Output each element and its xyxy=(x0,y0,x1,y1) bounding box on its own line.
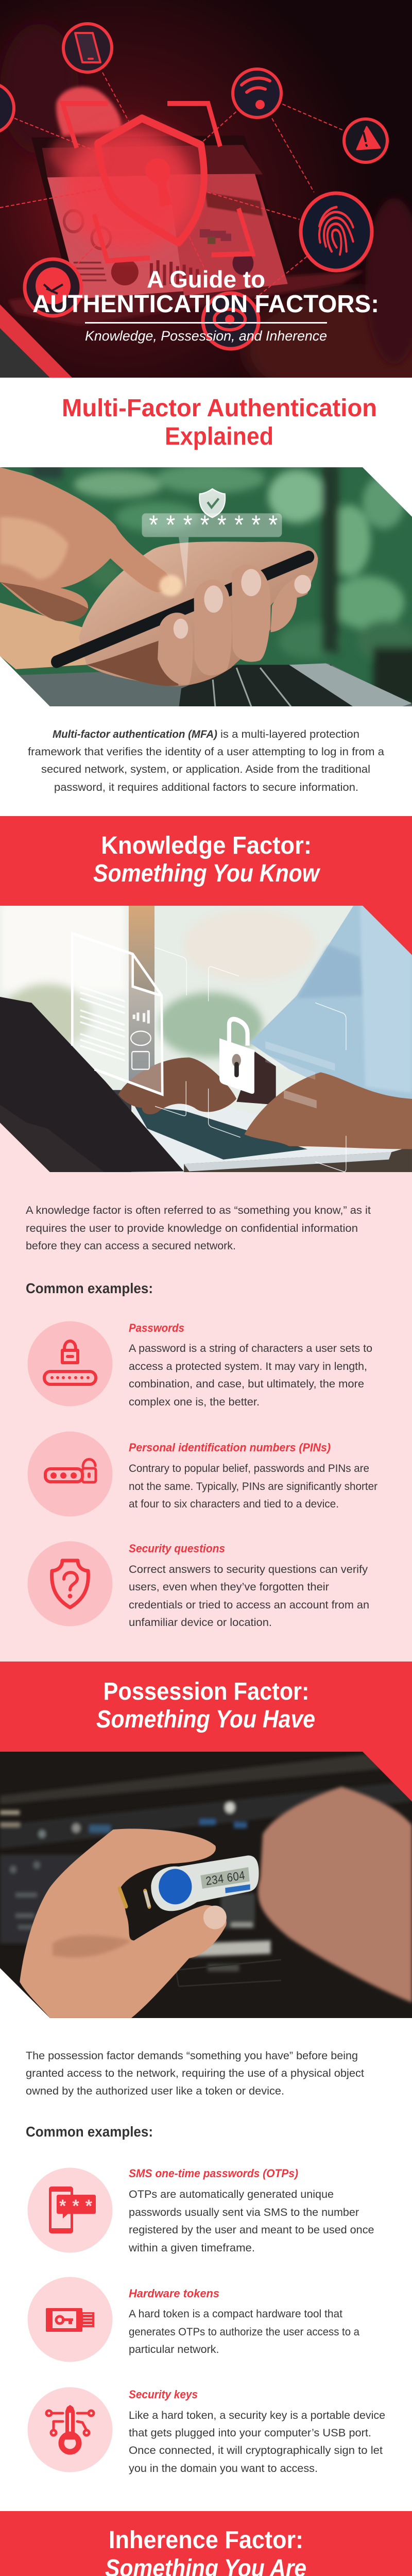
icon: partial left circle xyxy=(0,83,14,133)
icon: circuit key xyxy=(28,2387,112,2472)
heading: multi-factor authentication explained: Explained xyxy=(165,423,273,450)
example: passwords: combination, and case, but ultimately, the more xyxy=(129,1378,364,1390)
text block: mfa definition: Multi-factor authentication (MFA) xyxy=(53,728,217,740)
heading banner: possession factor xyxy=(0,1662,412,1803)
heading: multi-factor authentication explained xyxy=(62,395,377,450)
heading banner: knowledge factor: Knowledge Factor: xyxy=(101,832,312,859)
text block: mfa definition: framework that verifies the identity of a user attempting to log in from a xyxy=(28,746,384,758)
example: personal identification numbers: Contrary to popular belief, passwords and PINs are xyxy=(129,1463,369,1475)
text block: mfa definition: secured network, system, or application. Aside from the traditional xyxy=(41,764,370,775)
heading banner: inherence factor: Inherence Factor: xyxy=(109,2527,303,2554)
hero illustration xyxy=(0,0,412,408)
example: sms one-time passwords: SMS one-time passwords (OTPs) xyxy=(129,2167,298,2180)
example: security keys: you in the domain you want to access. xyxy=(129,2463,318,2475)
example: personal identification numbers: not the same. Typically, PINs are significantly shorter xyxy=(129,1481,377,1493)
example: security questions: users, even when they’ve forgotten their xyxy=(129,1581,329,1593)
example: hardware tokens: Hardware tokens xyxy=(129,2287,219,2300)
example: security questions: unfamiliar device or location. xyxy=(129,1617,272,1629)
text block: knowledge factor description: requires the user to provide knowledge on confidential information xyxy=(26,1223,358,1234)
example: security questions: Correct answers to security questions can verify xyxy=(129,1564,368,1575)
icon: hardware token xyxy=(28,2277,112,2362)
text block: knowledge factor description: A knowledge factor is often referred to as “something you know,” as it xyxy=(26,1205,371,1216)
text block: mfa definition: password, it requires additional factors to secure information. xyxy=(54,782,358,793)
example: passwords: A password is a string of characters a user sets to xyxy=(129,1343,372,1354)
heading banner: knowledge factor: Something You Know xyxy=(93,860,320,887)
icon: skull xyxy=(25,259,81,316)
shield xyxy=(98,118,204,243)
bottom left corner xyxy=(0,304,72,378)
icon: fingerprint xyxy=(301,193,372,270)
icon: password lock xyxy=(28,1321,112,1406)
text block: possession factor description: owned by the authorized user like a token or device. xyxy=(26,2086,284,2097)
example: personal identification numbers xyxy=(28,1431,377,1517)
example: passwords: access a protected system. It may vary in length, xyxy=(129,1361,367,1372)
example: security questions xyxy=(28,1541,369,1629)
example: sms one-time passwords xyxy=(28,2167,374,2254)
connector lines xyxy=(0,73,343,299)
example: sms one-time passwords: OTPs are automatically generated unique xyxy=(129,2189,334,2200)
example: passwords xyxy=(28,1321,372,1408)
example: security keys xyxy=(28,2387,385,2475)
heading banner: knowledge factor xyxy=(0,816,412,957)
example: hardware tokens: A hard token is a compact hardware tool that xyxy=(129,2308,342,2320)
title: a guide to authentication factors: A Guide to xyxy=(147,266,265,293)
background hand xyxy=(56,87,121,136)
red glow xyxy=(63,127,195,251)
heading banner: possession factor: Possession Factor: xyxy=(103,1678,309,1705)
example: personal identification numbers: at four to six characters and tied to a device. xyxy=(129,1498,339,1510)
text block: mfa definition xyxy=(28,728,384,793)
example: security keys: that gets plugged into your computer’s USB port. xyxy=(129,2427,371,2439)
title: a guide to authentication factors: Knowledge, Possession, and Inherence xyxy=(85,328,327,344)
title: a guide to authentication factors xyxy=(32,266,379,344)
text block: possession factor description xyxy=(26,2050,364,2097)
icon: phone xyxy=(63,24,112,72)
photo: hands entering password on phone xyxy=(0,464,412,709)
example: security keys: Like a hard token, a security key is a portable device xyxy=(129,2410,385,2421)
example: sms one-time passwords: registered by the user and meant to be used once xyxy=(129,2224,374,2236)
photo: hand holding hardware token xyxy=(0,1751,412,2020)
example: passwords: Passwords xyxy=(129,1321,184,1334)
example: hardware tokens xyxy=(28,2277,359,2362)
example: security keys: Once connected, it will cryptographically sign to let xyxy=(129,2445,383,2456)
example: personal identification numbers: Personal identification numbers (PINs) xyxy=(129,1441,331,1454)
example: sms one-time passwords: passwords usually sent via SMS to the number xyxy=(129,2207,359,2218)
icon: pin lock xyxy=(28,1431,112,1517)
text block: possession factor description: The possession factor demands “something you have” before being xyxy=(26,2050,358,2062)
text block: knowledge factor description xyxy=(26,1205,371,1252)
photo: typing on laptop with lock overlay xyxy=(0,904,412,1176)
icon: sms phone: *** xyxy=(59,2196,93,2216)
heading: common examples (possession): Common examples: xyxy=(26,2124,153,2140)
heading: multi-factor authentication explained: Multi-Factor Authentication xyxy=(62,395,377,422)
text block: mfa definition: is a multi-layered protection xyxy=(220,728,359,740)
example: hardware tokens: generates OTPs to authorize the user access to a xyxy=(129,2326,359,2338)
icon: warning xyxy=(344,119,387,162)
heading: common examples (knowledge): Common examples: xyxy=(26,1280,153,1296)
title: a guide to authentication factors: AUTHENTICATION FACTORS: xyxy=(32,291,379,318)
icon: sms phone xyxy=(28,2168,112,2252)
icon: eye xyxy=(203,293,259,349)
heading banner: inherence factor xyxy=(0,2511,412,2576)
laptop body xyxy=(32,135,284,262)
example: security questions: Security questions xyxy=(129,1542,225,1555)
icon: wifi xyxy=(233,69,281,117)
example: security keys: Security keys xyxy=(129,2388,198,2401)
text block: knowledge factor description: before they can access a secured network. xyxy=(26,1240,236,1252)
text block: possession factor description: granted access to the network, requiring the use of a physical object xyxy=(26,2067,364,2079)
icon: shield question xyxy=(28,1541,112,1626)
scan brackets xyxy=(62,104,253,261)
example: security questions: credentials or tried to access an account from an xyxy=(129,1599,369,1611)
photo: hand holding hardware token: 234 604 xyxy=(205,1868,246,1888)
example: sms one-time passwords: within a given timeframe. xyxy=(128,2242,255,2254)
example: passwords: complex one is, the better. xyxy=(129,1396,260,1408)
panel: knowledge factor background xyxy=(0,1123,412,1662)
photo: hands entering password on phone: ******** xyxy=(149,511,278,540)
heading banner: possession factor: Something You Have xyxy=(96,1706,315,1733)
example: hardware tokens: particular network. xyxy=(129,2344,219,2355)
